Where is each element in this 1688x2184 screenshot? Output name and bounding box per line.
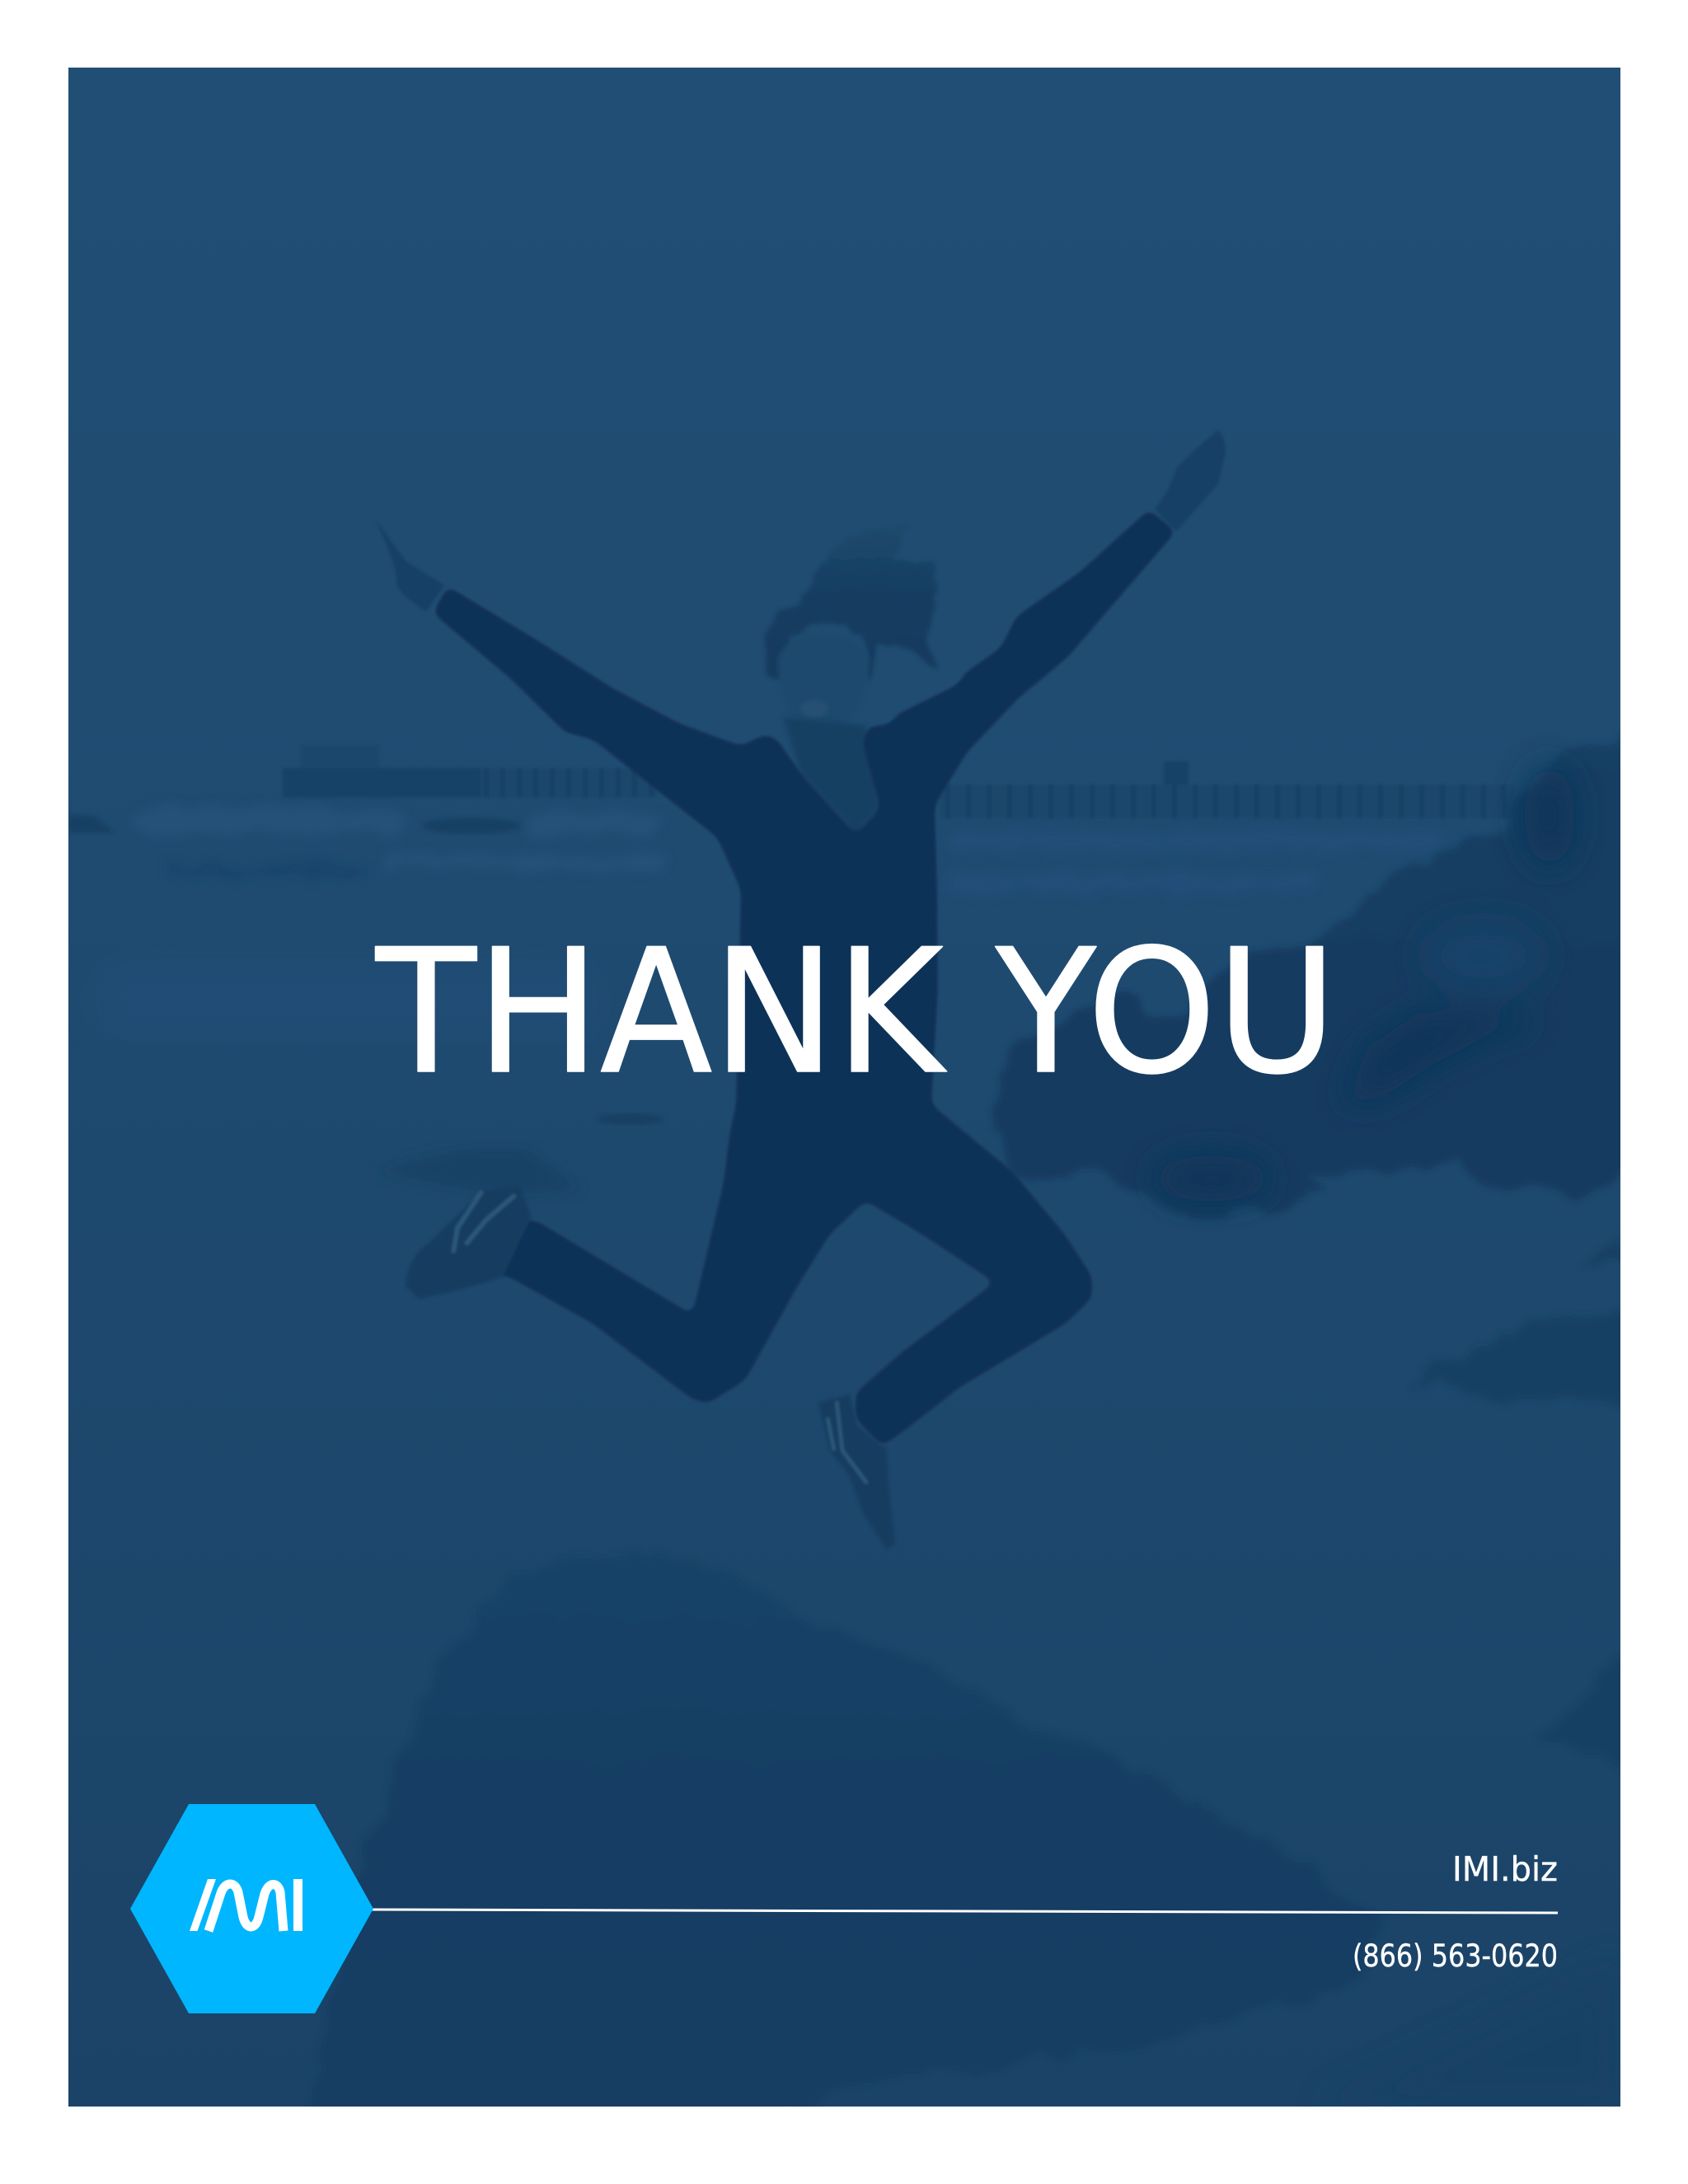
website: IMI.biz	[1452, 1849, 1558, 1889]
right shoe	[818, 1394, 895, 1549]
mouth	[802, 701, 827, 717]
face	[778, 647, 791, 681]
pier on the horizon	[284, 762, 1507, 818]
left shoe	[406, 1185, 532, 1299]
darker corner at lower right	[1319, 1961, 1620, 2107]
rocks on the right	[375, 738, 1640, 1776]
right hand	[1155, 430, 1226, 532]
neck and chest	[783, 717, 880, 834]
left hand	[379, 523, 443, 612]
rock shading	[1154, 766, 1574, 1202]
hair and ponytail	[766, 522, 937, 684]
icon: IMI hexagon logo	[130, 1804, 373, 2013]
torso, arms and legs	[433, 509, 1176, 1446]
offshore rocks	[68, 814, 521, 834]
phone number: (866) 563-0620	[1353, 1938, 1558, 1974]
divider line	[371, 1910, 1558, 1913]
foreground boulder	[306, 1552, 1385, 2126]
jumping woman silhouette	[375, 430, 1226, 1446]
beach rocks	[1419, 1243, 1620, 1767]
logo mark: IMI	[190, 1879, 302, 1931]
sea bands behind the jumper	[68, 809, 1442, 1038]
title: THANK YOU	[375, 913, 1337, 1113]
